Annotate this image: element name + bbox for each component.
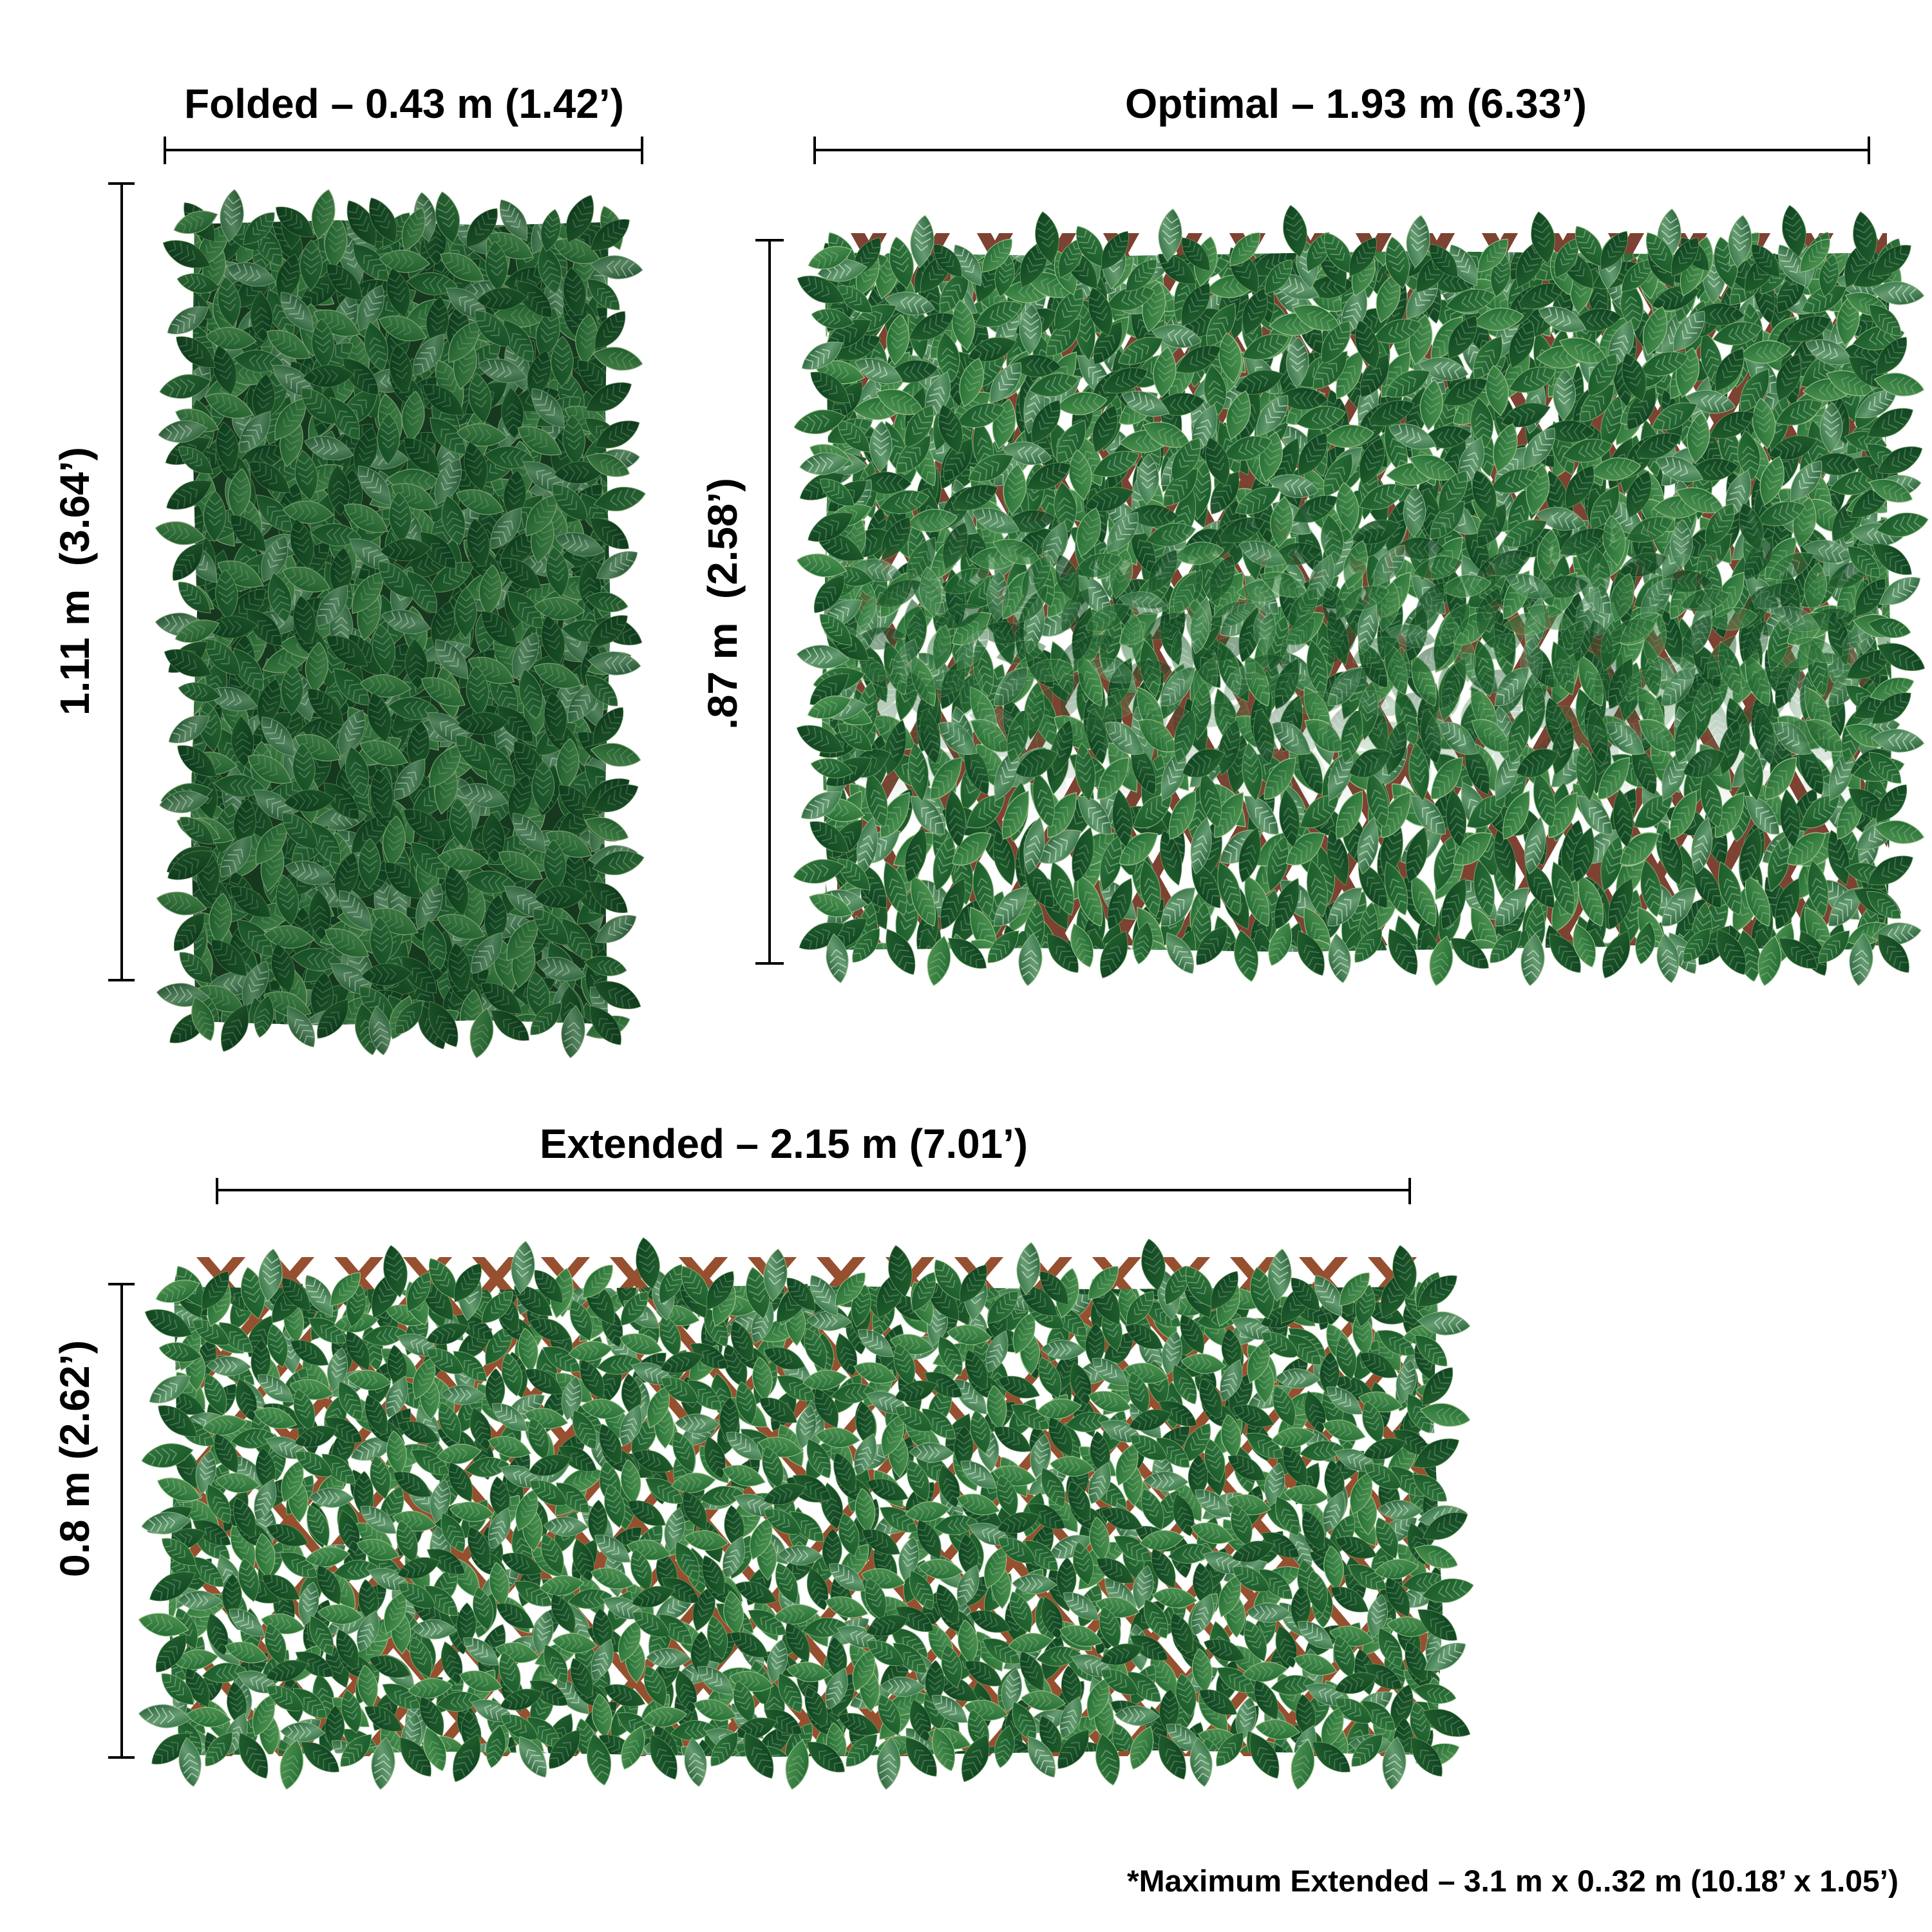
- panel: folded trellis: [52, 80, 648, 1060]
- dimension bar: extended width: [217, 1178, 1410, 1204]
- label: folded height: 1.11 m (3.64’): [52, 447, 98, 715]
- label: extended height: 0.8 m (2.62’): [52, 1340, 98, 1577]
- dimension bar: extended height: [108, 1283, 135, 1758]
- foliage: folded: [153, 187, 648, 1060]
- dimension bar: folded height: [108, 182, 135, 981]
- foliage: extended with lattice: [137, 1236, 1476, 1792]
- label: optimal height: .87 m (2.58’): [699, 478, 746, 730]
- dimension bar: optimal width: [815, 137, 1869, 164]
- dimension bar: folded width: [165, 137, 642, 164]
- dimension bar: optimal height: [755, 240, 784, 963]
- footnote: *Maximum Extended – 3.1 m x 0..32 m (10.18’ x 1.05’): [1127, 1864, 1899, 1898]
- heading: extended width: Extended – 2.15 m (7.01’): [540, 1121, 1028, 1167]
- heading: folded width: Folded – 0.43 m (1.42’): [184, 80, 624, 127]
- heading: optimal width: Optimal – 1.93 m (6.33’): [1125, 80, 1587, 127]
- panel: extended trellis: [52, 1121, 1476, 1792]
- panel: optimal trellis: [699, 80, 1931, 988]
- foliage: optimal with lattice: [791, 204, 1931, 988]
